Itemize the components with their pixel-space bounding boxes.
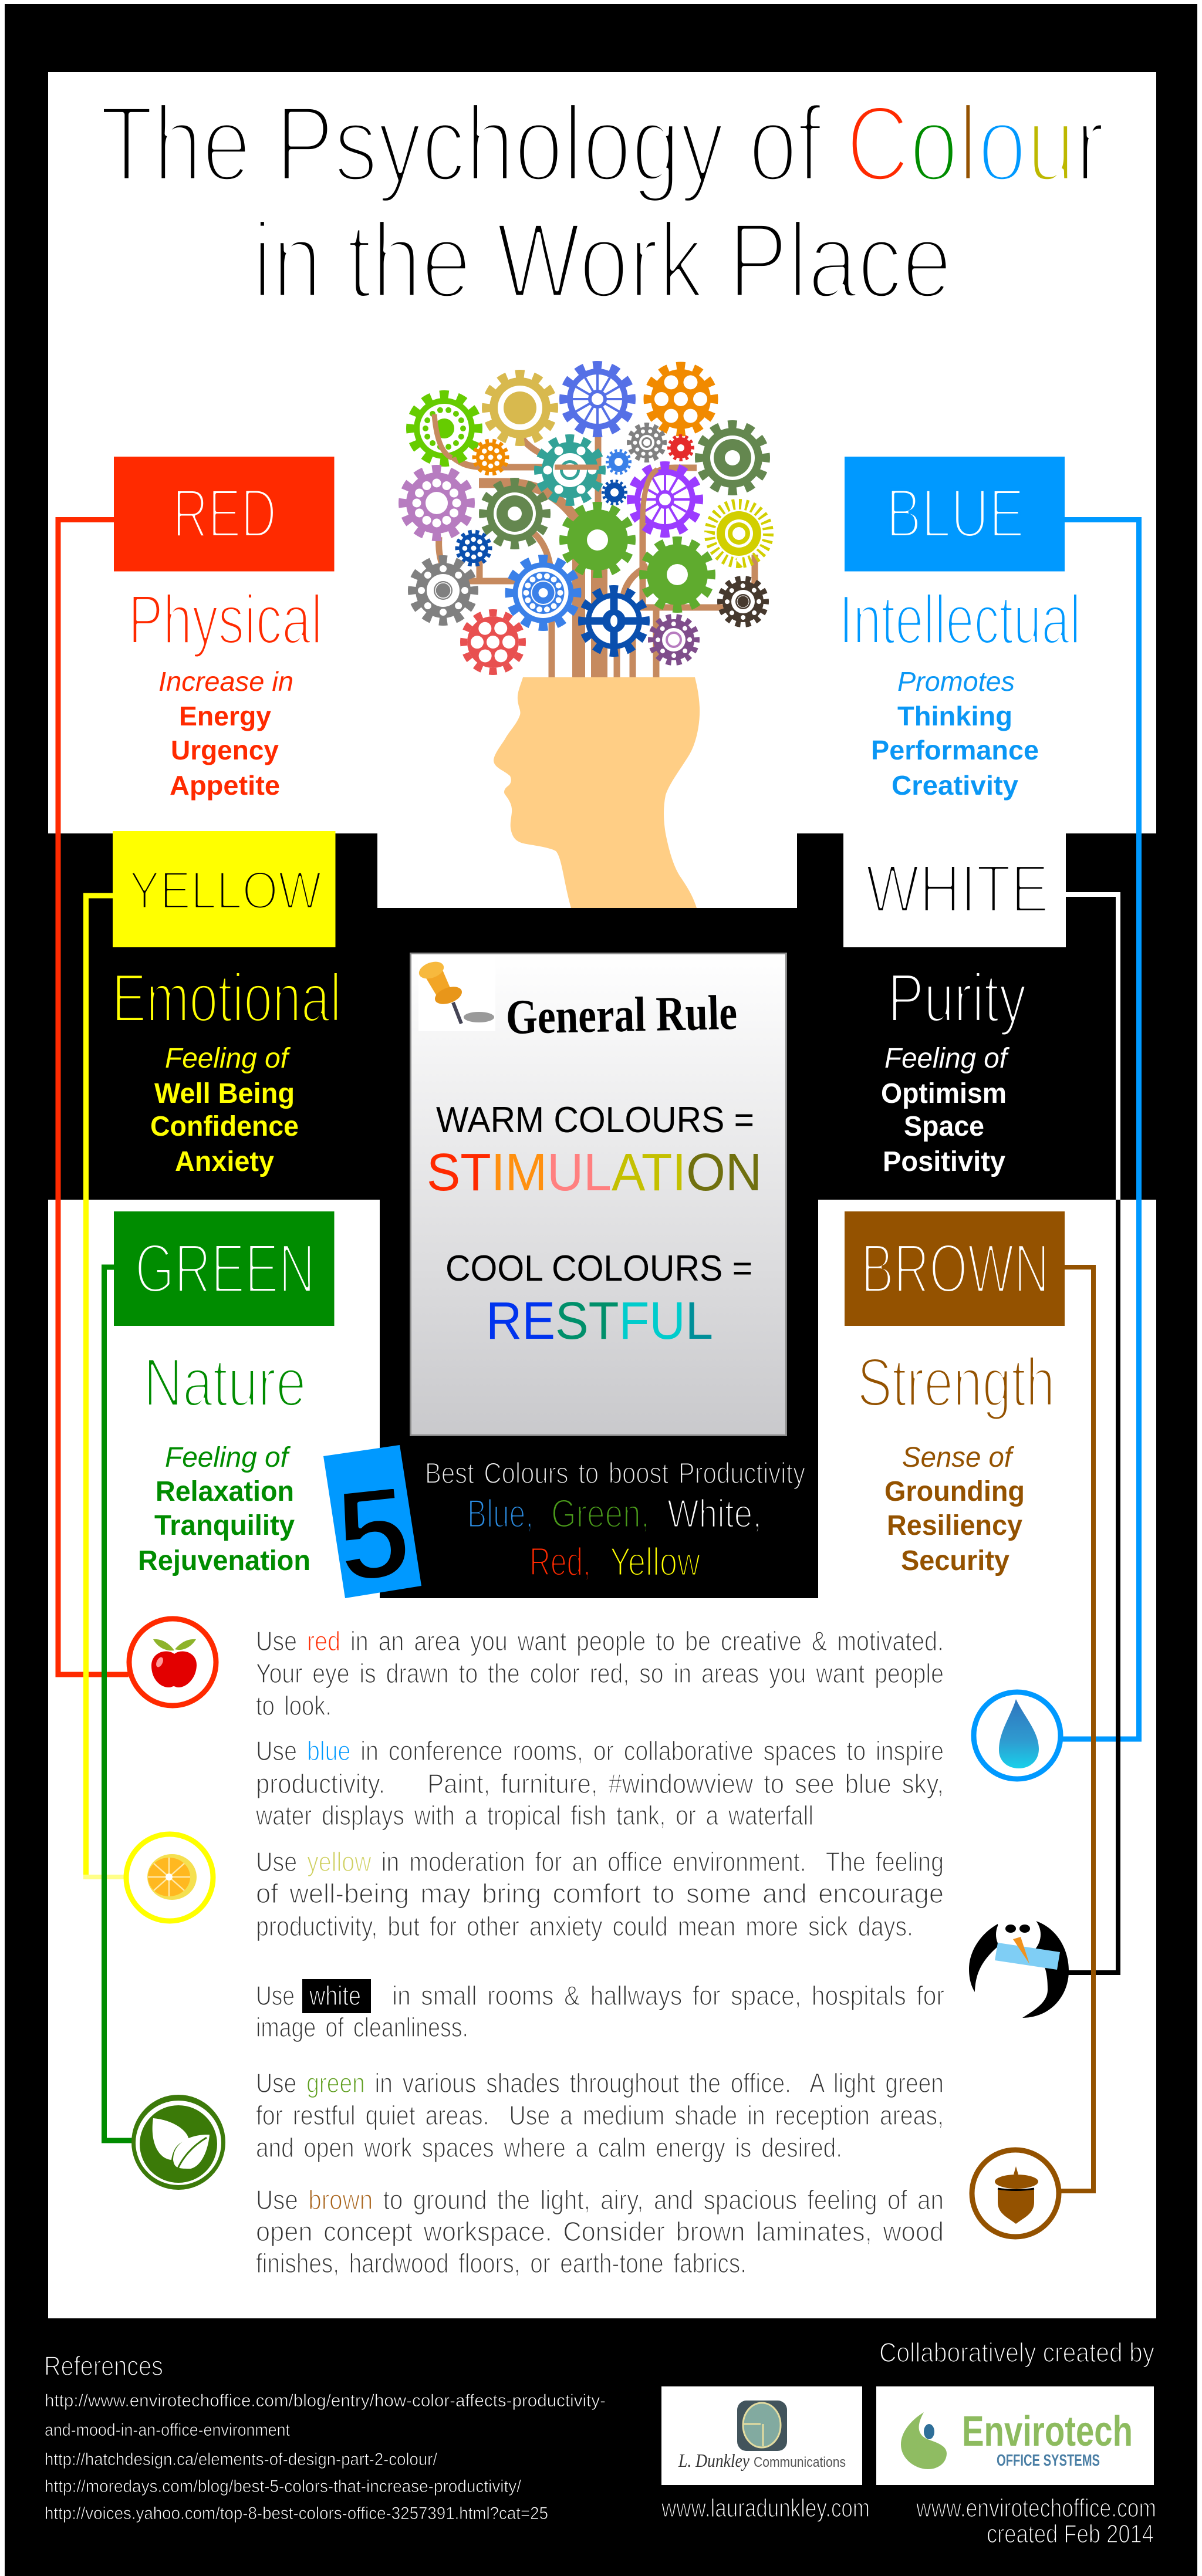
tile: GREEN [114, 1211, 335, 1326]
logo: L. Dunkley Communications: L. Dunkley [678, 2450, 750, 2471]
text block: use green: and open work spaces where a calm energy is desired. [256, 2132, 842, 2163]
text block: use brown [256, 2185, 944, 2278]
gear: mauve [403, 469, 471, 537]
text block: use blue: productivity. Paint, furniture, #windowview to see blue sky, [256, 1768, 944, 1799]
text: Blue: Blue, [467, 1491, 534, 1536]
text: collaboratively created by: Collaboratively created by [879, 2337, 1154, 2368]
gear: orange [647, 366, 714, 433]
panel: green [114, 1211, 335, 1576]
heading: Strength: Strength [857, 1344, 1055, 1420]
gear: purple wheel [631, 465, 699, 534]
icon: penguin [969, 1912, 1069, 2018]
tile: RED [114, 457, 335, 572]
gear: grey [412, 559, 474, 622]
heading: Purity: Purity [887, 959, 1027, 1037]
text block: use blue [255, 1736, 944, 1831]
text block: use red: Use red in an area you want people to be creative & motivated. [256, 1626, 944, 1656]
gear: small red [669, 436, 693, 460]
list: brown effects: Sense of [902, 1442, 1015, 1473]
tile label: YELLOW: YELLOW [129, 861, 322, 920]
text block: use green: for restful quiet areas. Use a medium shade in reception areas, [256, 2100, 944, 2131]
logo: L. Dunkley Communications [661, 2386, 862, 2485]
list: yellow effects: Feeling of [165, 1043, 291, 1074]
title [100, 83, 1105, 320]
gear: gold [486, 374, 554, 442]
gear: teal [538, 438, 602, 502]
icon: apple [129, 1619, 216, 1706]
tile label: WHITE: WHITE [866, 850, 1049, 927]
logo: Envirotech Office Systems: Envirotech [962, 2408, 1133, 2455]
list: reference links: http://moredays.com/blog/best-5-colors-that-increase-productivity/ [45, 2477, 522, 2496]
pipes visible through gears [434, 414, 657, 522]
list: green effects: Tranquility [154, 1510, 295, 1541]
heading: General Rule: General Rule [505, 985, 738, 1045]
callout: best five colours [323, 1445, 805, 1611]
heading: Emotional: Emotional [112, 959, 342, 1037]
logo: L. Dunkley Communications: Communications [754, 2455, 846, 2470]
title: in the Work Place [252, 200, 952, 320]
list: green effects [138, 1442, 310, 1576]
list: white effects: Positivity [883, 1146, 1005, 1177]
list: blue effects [871, 666, 1039, 801]
text: White: White, [667, 1491, 762, 1536]
list: white effects: Space [904, 1111, 984, 1142]
text: cool colours: COOL COLOURS = [445, 1248, 752, 1289]
tile: BLUE [845, 457, 1065, 572]
icon: water drop [974, 1692, 1061, 1779]
text block: use white: white [309, 1980, 361, 2011]
gear: small navy [603, 481, 626, 504]
gear: dark purple [651, 617, 697, 663]
connector: black [1068, 1200, 1118, 1973]
connector: red [58, 520, 129, 1674]
list: green effects: Relaxation [156, 1476, 294, 1507]
gear: bright blue [509, 559, 578, 627]
list: red effects [158, 666, 293, 801]
list: reference links: http://www.envirotechoffice.com/blog/entry/how-color-affects-productivity- [45, 2391, 606, 2410]
text block: use red: to look. [256, 1690, 332, 1721]
list: yellow effects [150, 1043, 299, 1177]
title: The Psychology of Colour [100, 83, 1105, 204]
panel: red [114, 457, 335, 801]
icon: number 5 tile: 5 [329, 1458, 417, 1611]
logo: Envirotech Office Systems: OFFICE SYSTEMS [997, 2451, 1100, 2469]
gear: yellow sun [710, 504, 768, 563]
tile: BROWN [845, 1211, 1065, 1326]
text block: use brown: Use brown to ground the light, airy, and spacious feeling of an [256, 2185, 944, 2215]
text block: use yellow: Use yellow in moderation for an office environment. The feeling [256, 1846, 944, 1877]
text: stimulation: STIMULATION [427, 1143, 762, 1202]
text block: use white [256, 1979, 944, 2042]
connector: yellow foot [83, 1875, 124, 1879]
list: white effects [881, 1043, 1010, 1177]
panel: top white panel with head area [48, 72, 1156, 947]
connector: blue [1061, 520, 1139, 1739]
text block: use yellow: of well-being may bring comfort to some and encourage [256, 1878, 944, 1909]
connector: white [1066, 894, 1118, 1200]
head with gear tree illustration [403, 365, 768, 908]
panel: white [866, 850, 1049, 1177]
connector: brown [1060, 1267, 1093, 2191]
list: blue effects: Creativity [892, 770, 1018, 801]
list: reference links: http://voices.yahoo.com/top-8-best-colors-office-3257391.html?cat=25 [45, 2504, 548, 2523]
heading: References: References [44, 2351, 163, 2381]
list: blue effects: Performance [871, 735, 1039, 765]
gear: green centre [563, 506, 632, 574]
tile label: GREEN: GREEN [135, 1230, 315, 1308]
text block: use green [256, 2068, 944, 2163]
card background [411, 953, 786, 1436]
text: warm colours: WARM COLOURS = [436, 1100, 754, 1140]
icon: leaves [131, 2095, 225, 2190]
gear: dark green [699, 424, 766, 491]
gear: periwinkle wheel [563, 365, 632, 433]
text block: use blue: water displays with a tropical fish tank, or a waterfall [255, 1800, 813, 1831]
list: brown effects [884, 1442, 1025, 1576]
heading: Intellectual: Intellectual [839, 581, 1081, 659]
text: Red: Red, [529, 1539, 591, 1584]
panel: lower white panel [48, 1200, 1156, 2318]
text block: use white: Use [256, 1980, 295, 2011]
text block: use blue: Use blue in conference rooms, or collaborative spaces to inspire [256, 1736, 944, 1766]
icon: acorn [972, 2150, 1059, 2237]
tile label: BROWN: BROWN [861, 1230, 1049, 1308]
list: white effects: Optimism [881, 1078, 1007, 1109]
panel: brown [845, 1211, 1065, 1576]
gear: red holes [464, 613, 522, 671]
gear: green right [643, 541, 711, 609]
gear: small blue [607, 451, 630, 473]
list: blue effects: Promotes [897, 666, 1015, 697]
list: reference links: http://hatchdesign.ca/elements-of-design-part-2-colour/ [45, 2450, 438, 2469]
text block: use white: in small rooms & hallways for space, hospitals for [392, 1980, 944, 2011]
text: Yellow: Yellow [610, 1539, 701, 1584]
panel: yellow [112, 831, 342, 1177]
panel: blue [839, 457, 1081, 801]
text: created date: created Feb 2014 [987, 2520, 1154, 2548]
text: laura dunkley url: www.lauradunkley.com [661, 2494, 870, 2523]
tile label: BLUE: BLUE [886, 475, 1024, 552]
gear: dark brown [720, 579, 766, 624]
connector lines [58, 520, 1139, 2191]
text block: use yellow: productivity, but for other anxiety could mean more sick days. [256, 1911, 913, 1942]
footer: references [44, 2351, 606, 2523]
list: brown effects: Grounding [884, 1476, 1025, 1507]
list: blue effects: Thinking [897, 701, 1012, 731]
tile label: RED: RED [173, 475, 276, 552]
list: reference links: and-mood-in-an-office-environment [45, 2420, 291, 2440]
text block: use green: Use green in various shades throughout the office. A light green [256, 2068, 944, 2098]
list: brown effects: Security [901, 1545, 1009, 1576]
list: green effects: Rejuvenation [138, 1545, 310, 1576]
gear: dark blue cross [582, 589, 646, 653]
text block: use white: image of cleanliness. [256, 2012, 468, 2042]
list: brown effects: Resiliency [887, 1510, 1022, 1541]
badge: white word [302, 1979, 371, 2013]
list: red effects: Appetite [170, 770, 280, 801]
text: Green: Green, [551, 1491, 650, 1536]
gear: lime [410, 394, 478, 462]
list: yellow effects: Anxiety [175, 1146, 274, 1177]
connector: green [104, 1267, 132, 2141]
list: reference links [45, 2391, 606, 2523]
pipes [434, 414, 755, 677]
list: white effects: Feeling of [884, 1043, 1010, 1074]
tile: YELLOW [113, 831, 336, 947]
list: yellow effects: Well Being [154, 1078, 295, 1109]
footer: credits [661, 2337, 1156, 2548]
logo: Envirotech Office Systems [876, 2386, 1154, 2485]
gear: small navy holes [457, 532, 490, 565]
icon: lemon [126, 1834, 213, 1921]
text: restful: RESTFUL [486, 1292, 713, 1351]
list: green effects: Feeling of [165, 1442, 291, 1473]
text block: use red: Your eye is drawn to the color red, so in areas you want people [256, 1658, 944, 1689]
text block: use brown: open concept workspace. Consider brown laminates, wood [256, 2216, 944, 2247]
list: red effects: Increase in [158, 666, 293, 697]
gear: dark green two [483, 482, 546, 545]
list: red effects: Urgency [171, 735, 279, 765]
head silhouette [494, 677, 700, 908]
gear: small orange [474, 441, 507, 474]
heading: Physical: Physical [128, 581, 323, 659]
connector: yellow [86, 896, 113, 1877]
heading: Nature: Nature [143, 1344, 306, 1420]
text block: use brown: finishes, hardwood floors, or earth-tone fabrics. [256, 2248, 747, 2278]
icon: push pin [417, 954, 495, 1031]
list: yellow effects: Confidence [150, 1111, 299, 1142]
panel: general rule card [411, 953, 786, 1436]
text: best colours caption: Best Colours to boost Productivity [425, 1457, 805, 1490]
text block: use yellow [256, 1846, 944, 1942]
gear: small grey [629, 425, 664, 460]
list: red effects: Energy [179, 701, 271, 731]
text block: use red [256, 1626, 944, 1721]
